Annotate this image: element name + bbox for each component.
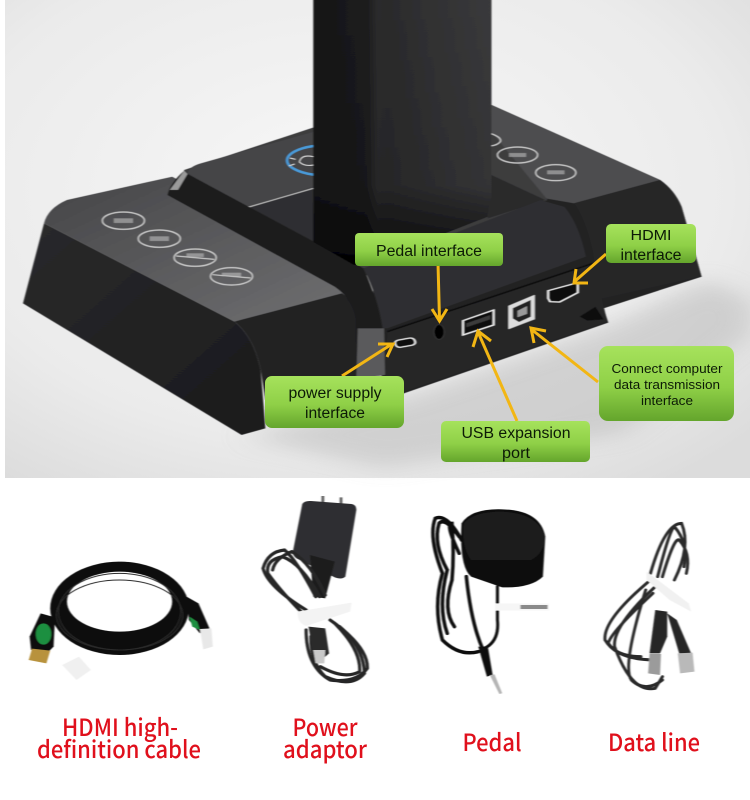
accessory caption: power adaptor: adaptor xyxy=(283,730,367,765)
arrow: pedal xyxy=(432,263,447,321)
data line xyxy=(605,523,694,689)
label: HDMI interface: HDMI xyxy=(630,227,672,244)
dust cap xyxy=(62,657,91,680)
accessory caption: power adaptor: Power xyxy=(292,708,358,743)
label: Connect computer: Connect computer xyxy=(612,361,723,376)
label: USB expansion port xyxy=(441,421,590,462)
icon: USB-B port xyxy=(508,295,535,329)
power adaptor xyxy=(263,496,367,682)
label: Connect computer xyxy=(599,346,734,421)
barcode tag xyxy=(495,603,549,611)
icon: blue power ring xyxy=(287,146,313,175)
label: Connect computer: data transmission xyxy=(614,377,720,392)
pedal xyxy=(433,509,549,694)
rail xyxy=(167,171,385,378)
port strip xyxy=(385,263,607,393)
label: USB expansion port: USB expansion xyxy=(462,425,570,442)
left top face xyxy=(44,177,354,322)
label: Pedal interface xyxy=(355,233,503,266)
ports xyxy=(394,283,578,348)
left connector xyxy=(30,613,55,653)
arrow: connect computer xyxy=(531,328,598,382)
center panel xyxy=(184,127,548,283)
icon: HDMI port xyxy=(548,283,578,302)
left front face xyxy=(23,223,265,435)
right body xyxy=(373,103,702,395)
accessory caption: data line: Data line xyxy=(608,723,700,758)
accessory caption: HDMI cable: definition cable xyxy=(37,730,201,765)
accessory caption: pedal: Pedal xyxy=(462,723,522,758)
shadow xyxy=(242,280,750,467)
panel: base unit illustration xyxy=(23,0,750,467)
panel: accessories xyxy=(29,496,694,694)
icon: audio jack xyxy=(434,325,444,339)
label: HDMI interface xyxy=(606,224,696,264)
label: Pedal interface: Pedal interface xyxy=(376,243,482,260)
label: power supply interface xyxy=(265,376,404,428)
label: USB expansion port: port xyxy=(502,445,531,462)
label: HDMI interface: interface xyxy=(620,247,682,264)
accessory caption: power adaptor xyxy=(283,708,367,765)
label: power supply interface: power supply xyxy=(288,385,382,402)
touch buttons xyxy=(102,133,576,285)
arrow: USB xyxy=(473,331,517,421)
callout arrows xyxy=(342,254,606,421)
label: Connect computer: interface xyxy=(641,393,693,408)
panel: product photo background xyxy=(5,0,750,478)
right connector xyxy=(187,597,209,633)
arrow: power xyxy=(342,344,393,376)
icon: USB-A port xyxy=(463,310,494,335)
accessory caption: HDMI cable: HDMI high- xyxy=(62,708,178,743)
column xyxy=(313,0,492,265)
label band xyxy=(298,603,352,626)
button glyphs xyxy=(114,153,564,276)
accessory caption: HDMI cable xyxy=(37,708,201,765)
label: power supply interface: interface xyxy=(305,405,365,422)
HDMI cable xyxy=(29,562,213,680)
icon: type-c port xyxy=(394,337,416,348)
arrow: HDMI xyxy=(574,254,606,283)
